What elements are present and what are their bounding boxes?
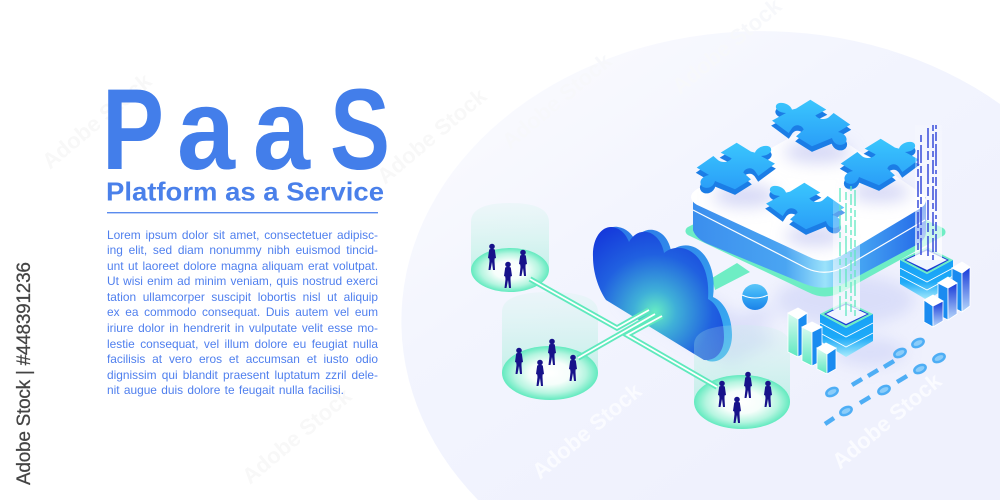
floor shadows bbox=[620, 274, 915, 366]
base connector bbox=[712, 263, 750, 290]
title rule bbox=[107, 212, 378, 213]
data stream: center bbox=[833, 186, 860, 316]
disc: group 3 bbox=[694, 375, 790, 429]
watermark: Adobe Stock bbox=[827, 368, 947, 474]
puzzle piece: bottom bbox=[766, 183, 844, 234]
title: PaaS bbox=[102, 66, 390, 194]
cylinder: group 1 bbox=[471, 203, 549, 270]
puzzle piece: left bbox=[697, 143, 775, 194]
bar chart: green bbox=[788, 308, 836, 374]
watermark: Adobe Stock bbox=[372, 83, 492, 189]
platform top bbox=[694, 128, 923, 258]
disc: group 1 bbox=[471, 248, 549, 292]
watermark: Adobe Stock bbox=[237, 383, 357, 489]
puzzle piece: top bbox=[772, 100, 850, 151]
watermark: Adobe Stock bbox=[37, 68, 157, 174]
background blob bbox=[401, 31, 1000, 500]
bar chart: blue bbox=[924, 262, 970, 327]
body text: lestie consequat, vel illum dolore eu feugiat nulla bbox=[107, 337, 378, 351]
body text: tation ullamcorper suscipit lobortis nisl ut aliquip bbox=[107, 290, 378, 304]
body text: Lorem ipsum dolor sit amet, consectetuer adipisc- bbox=[107, 228, 378, 242]
title: PaaS: S bbox=[330, 66, 390, 194]
body text: ing elit, sed diam nonummy nibh euismod tincid- bbox=[107, 243, 378, 257]
watermark: Adobe Stock bbox=[527, 378, 647, 484]
person group 1 bbox=[488, 244, 527, 288]
cylinder: group 3 bbox=[694, 325, 790, 402]
body text: ex ea commodo consequat. Duis autem vel eum bbox=[107, 305, 378, 319]
disc: group 2 bbox=[502, 346, 598, 400]
sphere bbox=[742, 284, 768, 310]
platform divider bbox=[693, 210, 925, 272]
body text: unt ut laoreet dolore magna aliquam erat volutpat. bbox=[107, 259, 378, 273]
body text: facilisis at vero eros et accumsan et iusto odio bbox=[107, 352, 378, 366]
person group 3 bbox=[718, 372, 772, 423]
body text: Ut wisi enim ad minim veniam, quis nostrud exerci bbox=[107, 274, 378, 288]
body text: iriure dolor in hendrerit in vulputate velit esse mo- bbox=[107, 321, 378, 335]
stock id label: Adobe Stock | #448391236 bbox=[14, 262, 35, 485]
cloud bbox=[593, 227, 732, 361]
cloud rim bbox=[599, 227, 732, 361]
cylinder: group 2 bbox=[502, 292, 598, 373]
title: PaaS: a bbox=[253, 66, 311, 194]
platform sides bbox=[694, 194, 925, 287]
server stack: right bbox=[900, 247, 953, 300]
title: PaaS: a bbox=[177, 66, 236, 194]
connector lines bbox=[530, 279, 717, 387]
data stream: right bbox=[915, 125, 942, 260]
title: PaaS: P bbox=[102, 66, 164, 194]
server stack: center bbox=[820, 301, 873, 357]
puzzle piece: right bbox=[841, 139, 919, 190]
cloud face bbox=[593, 227, 724, 360]
subtitle: Platform as a Service bbox=[106, 176, 384, 206]
puzzle shadows bbox=[713, 141, 910, 246]
platform green base bbox=[690, 170, 941, 292]
watermark: Adobe Stock bbox=[497, 48, 617, 154]
body text: nit augue duis dolore te feugait nulla facilisi. bbox=[107, 383, 344, 397]
people bbox=[488, 244, 772, 423]
body text bbox=[107, 228, 378, 397]
person group 2 bbox=[515, 339, 577, 386]
platform with puzzle pieces bbox=[690, 100, 941, 292]
body text: dignissim qui blandit praesent luptatum zzril dele- bbox=[107, 368, 378, 382]
binary digits bbox=[825, 337, 946, 424]
